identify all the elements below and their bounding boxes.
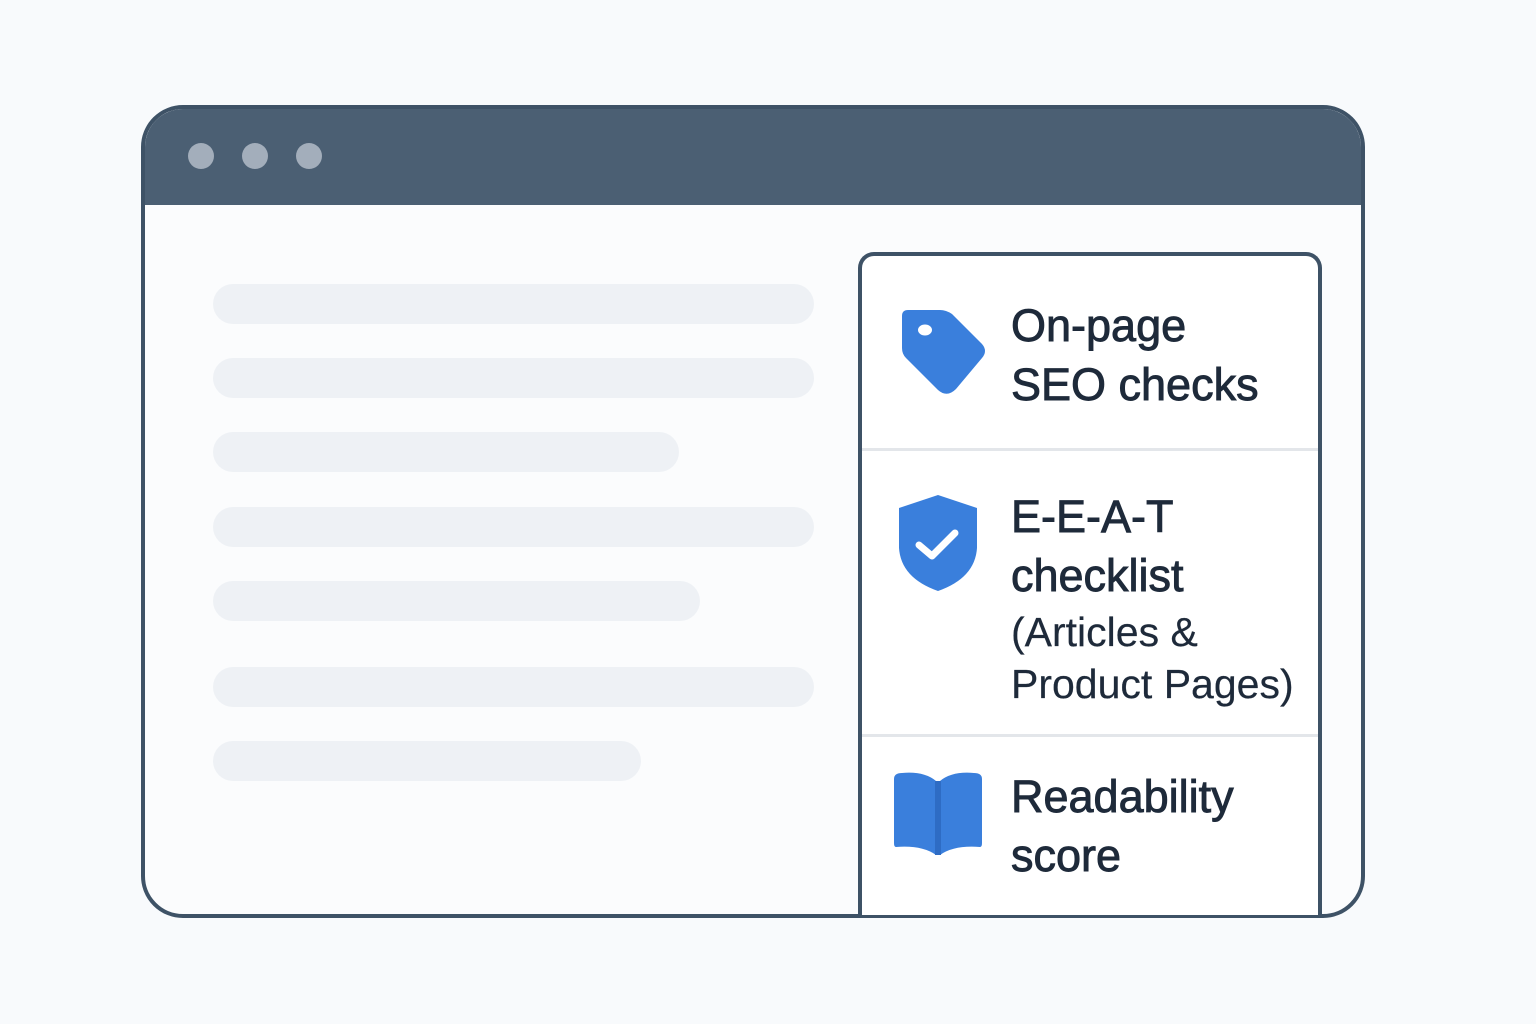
text: Readability score: score <box>1011 830 1121 881</box>
text: Readability score <box>1011 771 1234 881</box>
window dots <box>188 143 322 169</box>
browser window <box>141 105 1365 918</box>
content skeleton lines <box>213 284 814 781</box>
text: On-page SEO checks <box>1011 300 1259 410</box>
text: E-E-A-T checklist: Product Pages) <box>1011 661 1294 707</box>
text: E-E-A-T checklist: (Articles & <box>1011 609 1198 655</box>
text: Readability score: Readability <box>1011 771 1234 822</box>
text: E-E-A-T checklist: checklist <box>1011 550 1184 601</box>
text: On-page SEO checks: SEO checks <box>1011 359 1259 410</box>
title bar <box>145 109 1361 205</box>
icon: shield check <box>899 495 977 591</box>
icon: open book <box>894 772 982 855</box>
panel: feature list <box>858 252 1322 915</box>
text: On-page SEO checks: On-page <box>1011 300 1186 351</box>
icon: tag <box>902 310 985 394</box>
text: E-E-A-T checklist: E-E-A-T <box>1011 491 1174 542</box>
text: E-E-A-T checklist <box>1011 491 1294 707</box>
